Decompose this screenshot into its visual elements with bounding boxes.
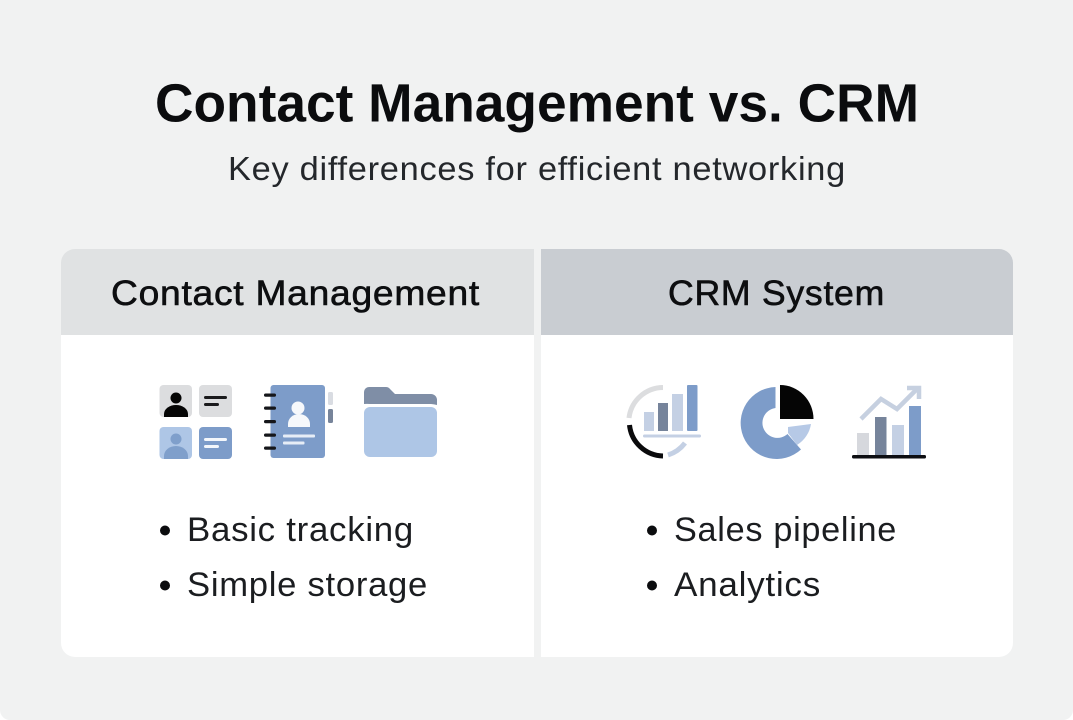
bullet list: contact management [160,511,428,604]
icon: bar chart with ring [629,385,701,456]
heading: crm system: CRM System [668,273,885,313]
icon: folder [364,387,437,457]
panel header: contact management [61,249,534,335]
icon: donut chart [741,385,814,459]
bullet: basic tracking: Basic tracking [187,511,414,549]
title: Contact Management vs. CRM [155,74,919,134]
subtitle: Key differences for efficient networking [228,151,846,188]
icon: contact cards grid [160,385,232,459]
panel body: contact management [61,335,534,657]
icon: address book [264,385,333,458]
panel header: crm system [541,249,1013,335]
bullet list: crm system [647,511,897,604]
icon: growth chart [852,388,926,458]
panel body: crm system [541,335,1013,657]
panel: contact management [61,249,534,657]
bullet: sales pipeline: Sales pipeline [674,511,897,549]
bullet: simple storage: Simple storage [187,566,428,604]
bullet: analytics: Analytics [674,566,821,604]
panel: crm system [541,249,1013,657]
heading: contact management: Contact Management [111,273,480,313]
